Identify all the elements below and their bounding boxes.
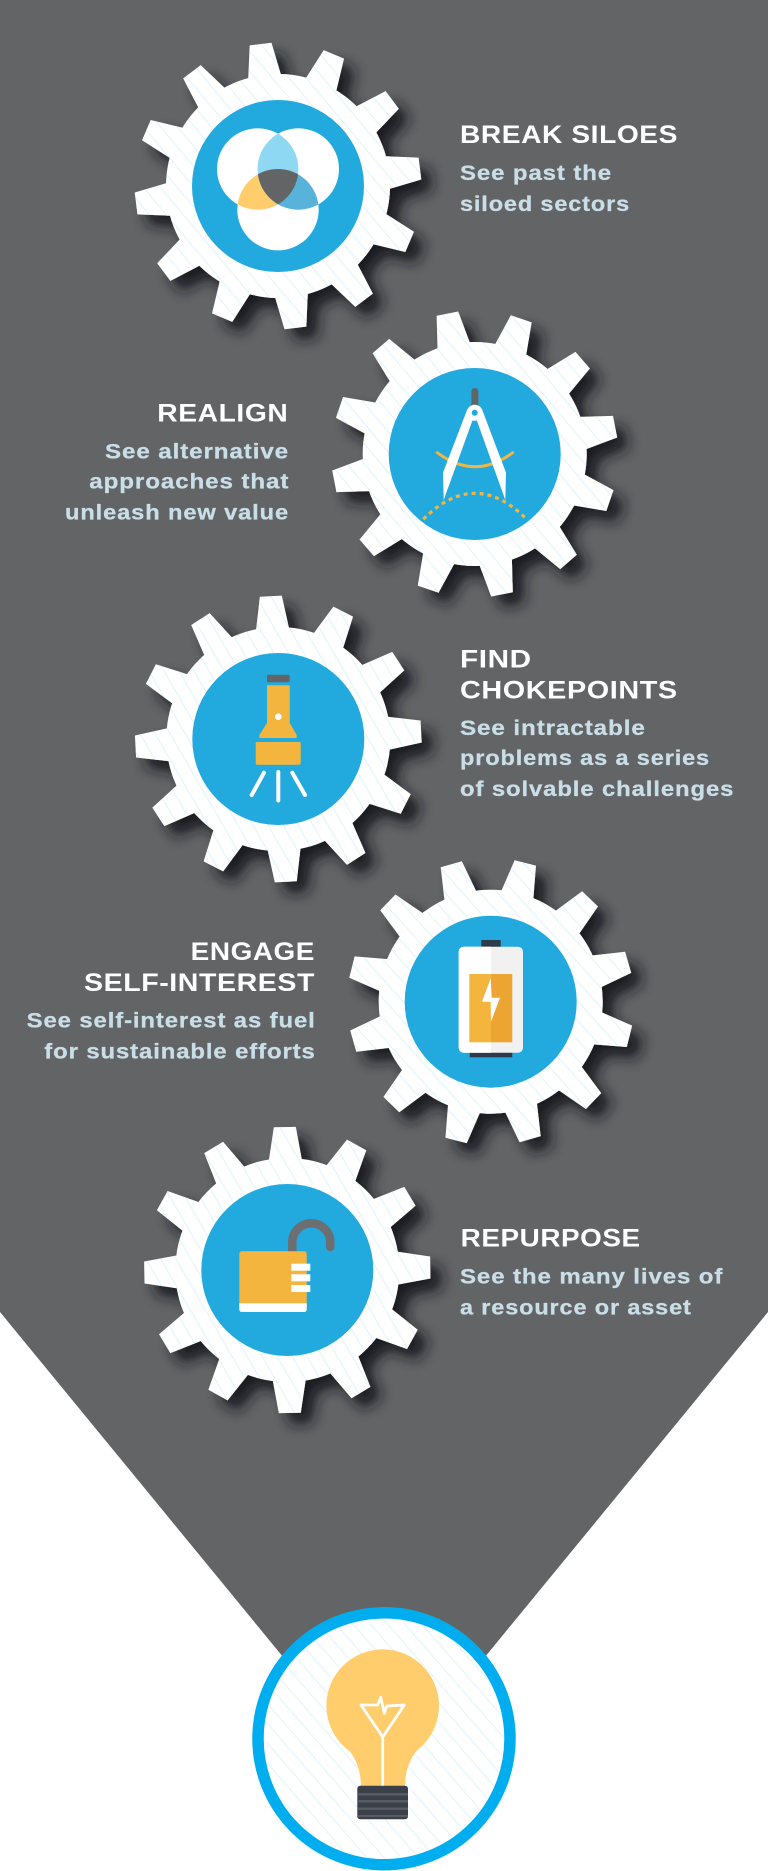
heading: realign: REALIGN <box>157 400 288 428</box>
panel: engage self-interest <box>27 860 650 1161</box>
text: break siloes description: siloed sectors <box>460 192 630 216</box>
heading: find chokepoints: CHOKEPOINTS <box>460 676 678 704</box>
text: find chokepoints description: of solvable challenges <box>460 777 734 801</box>
icon: open padlock <box>201 1184 373 1356</box>
text: engage self-interest description: See self-interest as fuel <box>27 1009 316 1033</box>
gear: repurpose <box>144 1126 450 1432</box>
text: realign description: unleash new value <box>65 500 289 524</box>
text: break siloes description: See past the <box>460 161 612 185</box>
text: engage self-interest description: for sustainable efforts <box>44 1039 316 1063</box>
text: repurpose description: See the many lives of <box>460 1264 723 1288</box>
text: find chokepoints description: See intractable <box>460 716 646 740</box>
text: realign description <box>65 439 289 524</box>
gear: realign <box>332 312 636 614</box>
panel: light bulb medallion <box>217 1571 551 1871</box>
icon: light bulb <box>326 1649 439 1819</box>
heading: break siloes: BREAK SILOES <box>460 121 678 149</box>
panel: realign <box>66 312 636 614</box>
icon: drawing compass <box>389 368 561 540</box>
text: break siloes description <box>460 161 630 216</box>
heading: find chokepoints <box>460 645 678 704</box>
panel: find chokepoints <box>134 596 733 902</box>
panel: break siloes <box>134 42 676 348</box>
heading: find chokepoints: FIND <box>460 645 532 673</box>
gear: break siloes <box>134 42 440 348</box>
ring: medallion circle <box>217 1571 551 1871</box>
icon: flashlight <box>192 653 364 825</box>
text: realign description: approaches that <box>89 470 289 494</box>
icon: battery <box>405 916 577 1088</box>
heading: engage self-interest: ENGAGE <box>191 938 315 966</box>
text: realign description: See alternative <box>105 439 289 463</box>
text: find chokepoints description <box>460 716 734 801</box>
panel: repurpose <box>144 1126 723 1432</box>
gear: find chokepoints <box>134 596 441 902</box>
text: engage self-interest description <box>27 1009 316 1063</box>
heading: repurpose: REPURPOSE <box>461 1225 641 1253</box>
text: repurpose description <box>460 1264 723 1319</box>
heading: engage self-interest: SELF-INTEREST <box>84 969 315 997</box>
gear: engage self-interest <box>349 860 650 1161</box>
icon: overlapping circles <box>192 100 364 272</box>
text: find chokepoints description: problems as a series <box>460 746 710 770</box>
text: repurpose description: a resource or asset <box>460 1295 692 1319</box>
heading: engage self-interest <box>84 938 315 997</box>
